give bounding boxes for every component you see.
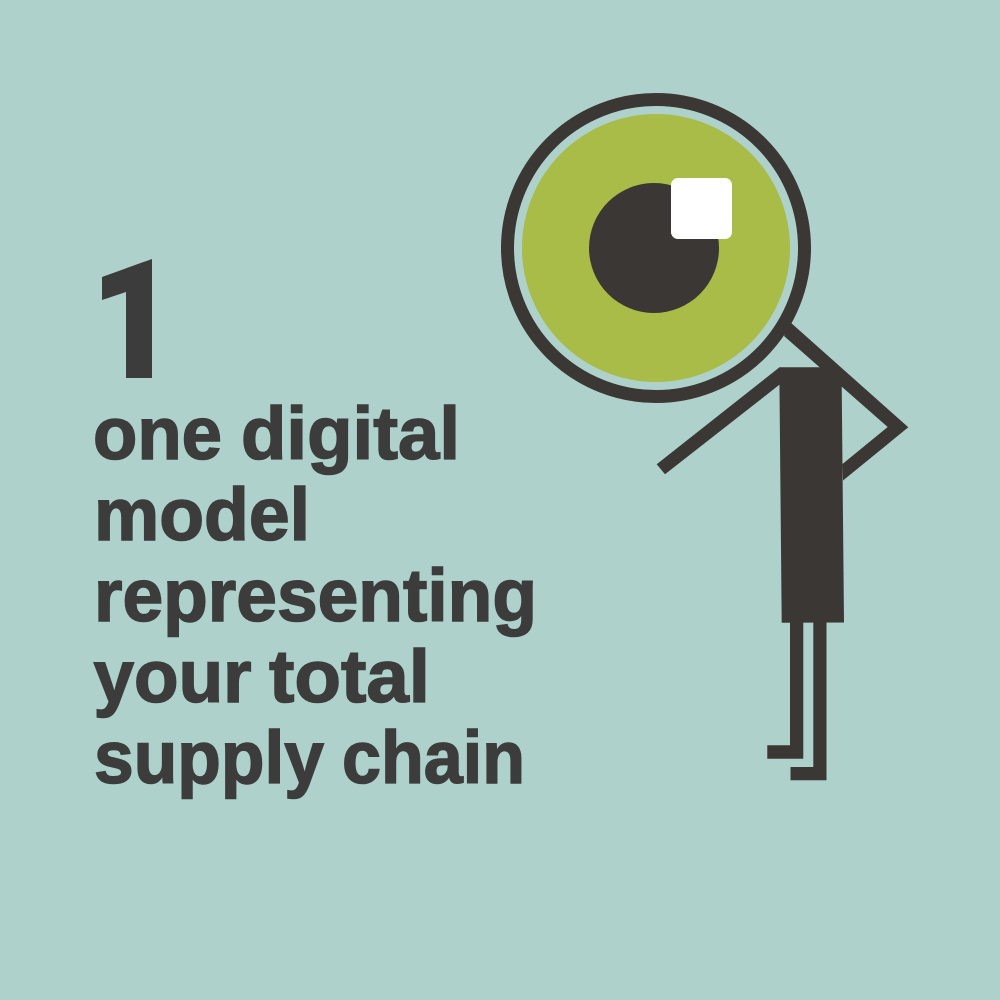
- line: one digital: digital: [241, 392, 460, 475]
- eye highlight: [671, 178, 732, 239]
- headline text: [93, 392, 537, 800]
- left leg: [767, 622, 803, 759]
- body: [779, 367, 844, 623]
- line: model: model: [94, 473, 310, 556]
- right leg: [790, 622, 826, 780]
- line: your total: your: [94, 635, 252, 718]
- pupil: [589, 183, 719, 313]
- line: one digital: one: [93, 392, 222, 475]
- line: your total: total: [269, 635, 430, 718]
- iris: [522, 114, 790, 382]
- near arm: [657, 367, 780, 474]
- magnifying glass handle and far arm: [784, 322, 908, 480]
- lens ring: [508, 100, 804, 396]
- line: one digital: [93, 392, 460, 475]
- line: supply chain: supply: [94, 716, 324, 799]
- line: supply chain: [94, 716, 525, 799]
- line: supply chain: chain: [342, 716, 525, 799]
- line: your total: [94, 635, 430, 718]
- line: representing: representing: [94, 554, 537, 637]
